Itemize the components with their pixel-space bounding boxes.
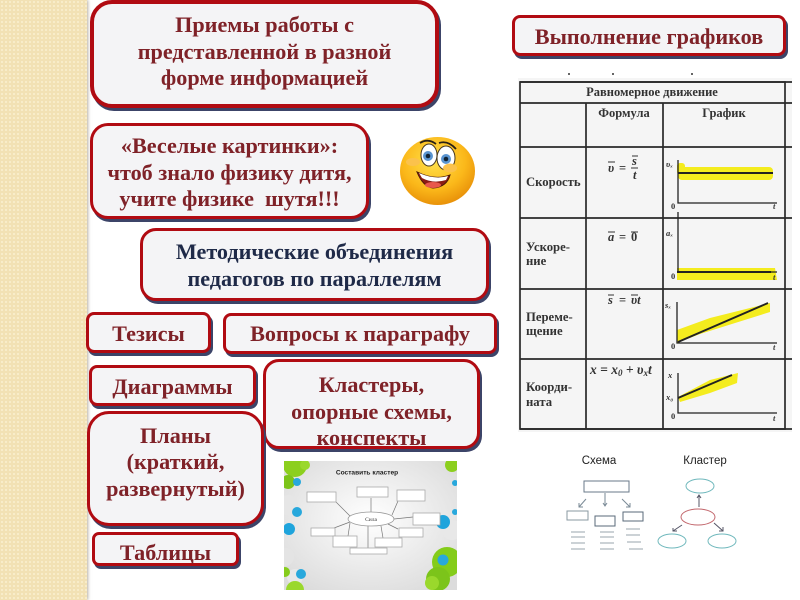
formula vector marks	[608, 156, 638, 295]
panel: clusters	[263, 359, 480, 449]
row labels	[526, 175, 581, 409]
panel: plans: Планы	[140, 423, 211, 448]
row labels: Коорди-	[526, 380, 572, 394]
row labels: Скорость	[526, 175, 581, 189]
table headings	[586, 85, 747, 120]
table grid	[520, 82, 792, 429]
row labels: щение	[526, 324, 563, 338]
table headings: График	[702, 106, 747, 120]
panel: working with information	[90, 0, 439, 108]
formulas: υt	[631, 293, 641, 307]
graph labels	[664, 159, 776, 423]
diagram: scheme	[566, 455, 644, 550]
diagram: cluster: Кластер	[683, 455, 727, 467]
panel: working with information: Приемы работы с	[175, 12, 354, 37]
panel: clusters: опорные схемы,	[291, 399, 452, 424]
formulas: 0	[618, 368, 623, 378]
graph axes and lines	[677, 160, 777, 413]
graph labels: t	[773, 201, 776, 211]
panel: clusters: конспекты	[317, 425, 426, 450]
graph labels: t	[773, 342, 776, 352]
table headings: Равномерное движение	[586, 85, 718, 99]
panel: diagrams	[89, 365, 256, 406]
panel: plans: (краткий,	[127, 449, 224, 474]
panel: diagrams: Диаграммы	[112, 374, 233, 399]
panel: funny pictures: чтоб знало физику дитя,	[107, 160, 352, 185]
yellow highlights	[677, 163, 777, 402]
formulas: t	[648, 362, 653, 377]
panel: clusters: Кластеры,	[319, 372, 424, 397]
diagram: cluster	[658, 455, 736, 548]
icon: smiling emoji	[400, 137, 475, 205]
diagram: scheme: Схема	[582, 455, 617, 467]
panel: working with information: представленной в разной	[138, 39, 391, 64]
panel: methodical associations	[140, 228, 489, 301]
connectors	[334, 498, 413, 548]
graph labels: t	[773, 413, 776, 423]
decorative spheres	[276, 453, 462, 599]
formulas: t	[633, 168, 637, 182]
row labels: Ускоре-	[526, 240, 570, 254]
panel: tables	[92, 532, 239, 566]
formulas: =	[619, 293, 626, 307]
row labels: ната	[526, 395, 553, 409]
panel: paragraph questions: Вопросы к параграфу	[250, 321, 470, 346]
formulas: s	[607, 293, 613, 307]
panel: working with information: форме информацией	[161, 65, 368, 90]
panel: plans: развернутый)	[106, 476, 245, 501]
formulas: + υ	[622, 362, 644, 377]
graph labels: sₓ	[664, 300, 671, 310]
panel: funny pictures: учите физике шутя!!!	[119, 186, 340, 211]
graph labels: 0	[671, 341, 675, 351]
formulas: 0	[631, 230, 637, 244]
table headings: Формула	[598, 106, 650, 120]
panel: graphing heading: Выполнение графиков	[535, 24, 763, 49]
formulas: a	[608, 230, 614, 244]
graph labels: x	[667, 370, 673, 380]
graph labels: x₀	[665, 392, 673, 402]
formulas: s	[631, 154, 637, 168]
panel: methodical associations: Методические объединения	[176, 239, 453, 264]
panel: funny pictures: «Веселые картинки»:	[121, 133, 338, 158]
panel: graphing heading	[512, 15, 786, 56]
formulas: =	[619, 230, 626, 244]
row labels: Переме-	[526, 310, 573, 324]
panel: theses	[86, 312, 211, 353]
graph labels: υₓ	[666, 159, 673, 169]
panel: funny pictures	[90, 123, 369, 219]
formulas: =	[619, 161, 626, 175]
formulas: x = x	[590, 362, 618, 377]
graph labels: 0	[671, 201, 675, 211]
graph labels: 0	[671, 271, 675, 281]
formulas	[589, 154, 653, 378]
image: compose cluster slide	[284, 461, 457, 590]
panel: methodical associations: педагогов по параллелям	[187, 266, 442, 290]
image: compose cluster slide: Сила	[365, 517, 377, 523]
panel: theses: Тезисы	[112, 321, 185, 346]
slide title: Составить кластер	[336, 470, 398, 476]
graph labels: aₓ	[666, 228, 673, 238]
row labels: ние	[526, 254, 547, 268]
formulas: x	[643, 368, 649, 378]
graph labels: t	[773, 272, 776, 282]
graph labels: 0	[671, 411, 675, 421]
central ellipse	[348, 512, 394, 526]
panel: plans	[87, 411, 264, 526]
panel: tables: Таблицы	[120, 540, 211, 565]
panel: paragraph questions	[223, 313, 497, 354]
cluster boxes	[307, 487, 440, 554]
background strip	[0, 0, 87, 600]
formulas: υ	[608, 161, 614, 175]
